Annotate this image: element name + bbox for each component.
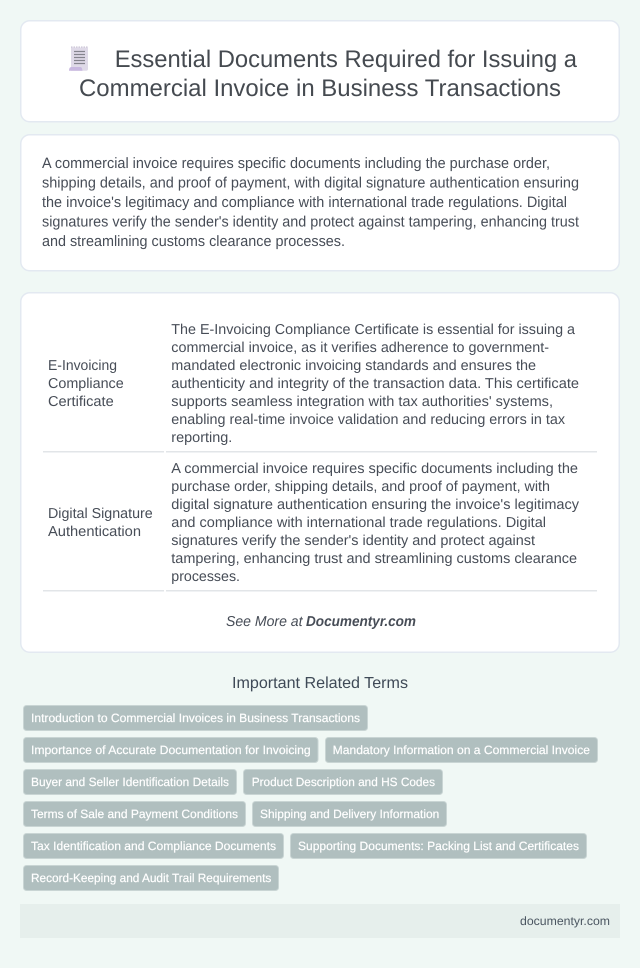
row: digital signature authentication: Authentication bbox=[48, 524, 141, 540]
tag bbox=[24, 802, 246, 826]
tag: Mandatory Information on a Commercial Invoice bbox=[333, 743, 590, 757]
row: e-invoicing compliance certificate: reporting. bbox=[171, 430, 232, 446]
footer bbox=[20, 904, 620, 938]
tag bbox=[24, 770, 236, 794]
row: digital signature authentication: signatures verify the sender's identity and protect against bbox=[171, 533, 535, 549]
tag: Record-Keeping and Audit Trail Requirements bbox=[31, 871, 271, 885]
see more link: See More at bbox=[226, 614, 303, 630]
tag: Terms of Sale and Payment Conditions bbox=[31, 807, 238, 821]
tag: Introduction to Commercial Invoices in Business Transactions bbox=[31, 711, 360, 725]
row: digital signature authentication: purchase order, shipping details, and proof of payment, with bbox=[171, 479, 550, 495]
tag bbox=[252, 802, 446, 826]
tag bbox=[290, 834, 586, 858]
tag bbox=[24, 834, 284, 858]
title bbox=[79, 46, 578, 102]
row: digital signature authentication: digital signature authentication ensuring the invoice's legitimacy bbox=[171, 497, 580, 513]
icon: invoice scroll bbox=[69, 47, 88, 71]
tag: Tax Identification and Compliance Documents bbox=[31, 839, 276, 853]
row: digital signature authentication: and compliance with international trade regulations. Digital bbox=[171, 515, 546, 531]
panel: header bbox=[21, 21, 619, 122]
tag: Importance of Accurate Documentation for Invoicing bbox=[31, 743, 311, 757]
row: e-invoicing compliance certificate: commercial invoice, as it verifies adherence to government- bbox=[171, 340, 549, 356]
row: e-invoicing compliance certificate: E-Invoicing bbox=[48, 358, 117, 374]
heading: important related terms: Important Related Terms bbox=[232, 675, 408, 692]
tag: Buyer and Seller Identification Details bbox=[31, 775, 229, 789]
title: Commercial Invoice in Business Transactions bbox=[79, 75, 561, 102]
tag bbox=[326, 738, 598, 762]
tag: Supporting Documents: Packing List and Certificates bbox=[298, 839, 579, 853]
panel: introduction text: the invoice's legitimacy and compliance with international trade regulations. Digital bbox=[42, 194, 567, 211]
tag bbox=[24, 706, 368, 730]
panel: introduction text: A commercial invoice requires specific documents including the purchase order, bbox=[42, 155, 550, 172]
row: e-invoicing compliance certificate: enabling real-time invoice validation and reducing errors in tax bbox=[171, 412, 566, 428]
row: e-invoicing compliance certificate: Compliance bbox=[48, 376, 124, 392]
row: digital signature authentication: tampering, enhancing trust and streamlining customs clearance bbox=[171, 551, 577, 567]
row: e-invoicing compliance certificate: The E-Invoicing Compliance Certificate is essential for issuing a bbox=[171, 322, 575, 338]
see more link: Documentyr.com bbox=[306, 614, 416, 630]
tag bbox=[24, 738, 318, 762]
tag bbox=[24, 866, 278, 890]
tag: Product Description and HS Codes bbox=[252, 775, 435, 789]
row: e-invoicing compliance certificate bbox=[48, 322, 579, 446]
panel: introduction text bbox=[21, 135, 619, 271]
row: digital signature authentication: processes. bbox=[171, 569, 240, 585]
row: digital signature authentication bbox=[48, 461, 580, 585]
panel: introduction text: shipping details, and proof of payment, with digital signature authentication ensuring bbox=[42, 174, 579, 192]
panel: introduction text: signatures verify the sender's identity and protect against tampering, enhancing trust bbox=[42, 214, 580, 230]
row: e-invoicing compliance certificate: Certificate bbox=[48, 394, 114, 410]
footer: documentyr.com bbox=[520, 914, 610, 928]
panel: document table bbox=[21, 293, 619, 652]
tag bbox=[244, 770, 442, 794]
tag: Shipping and Delivery Information bbox=[260, 807, 439, 821]
row: e-invoicing compliance certificate: supports seamless integration with tax authorities' systems, bbox=[171, 394, 553, 410]
row: digital signature authentication: A commercial invoice requires specific documents including the bbox=[171, 461, 578, 477]
panel: introduction text: and streamlining customs clearance processes. bbox=[42, 233, 345, 250]
see more link bbox=[226, 614, 416, 630]
row: e-invoicing compliance certificate: authenticity and integrity of the transaction data. This certificate bbox=[171, 376, 579, 392]
row: e-invoicing compliance certificate: mandated electronic invoicing standards and ensures the bbox=[171, 358, 536, 374]
related term tags bbox=[24, 706, 598, 890]
row: digital signature authentication: Digital Signature bbox=[48, 506, 153, 522]
title: Essential Documents Required for Issuing a bbox=[115, 46, 578, 73]
